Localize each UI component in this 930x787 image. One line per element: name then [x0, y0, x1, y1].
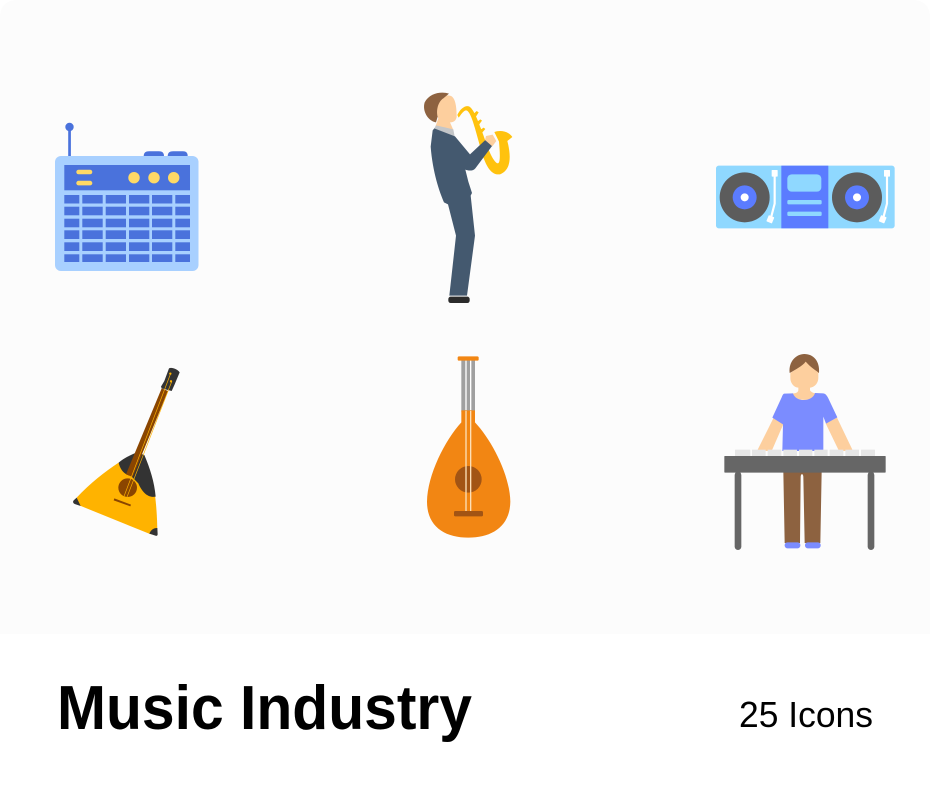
icon: lute: [427, 356, 510, 538]
icon count label: 25 Icons: [739, 694, 873, 735]
title: Music Industry: [57, 674, 472, 743]
icon: DJ turntable deck: [716, 166, 895, 228]
icon: saxophone player: [424, 93, 512, 303]
icon: radio: [55, 123, 198, 271]
icon: balalaika: [73, 368, 180, 536]
icon: keyboard player: [724, 354, 886, 550]
